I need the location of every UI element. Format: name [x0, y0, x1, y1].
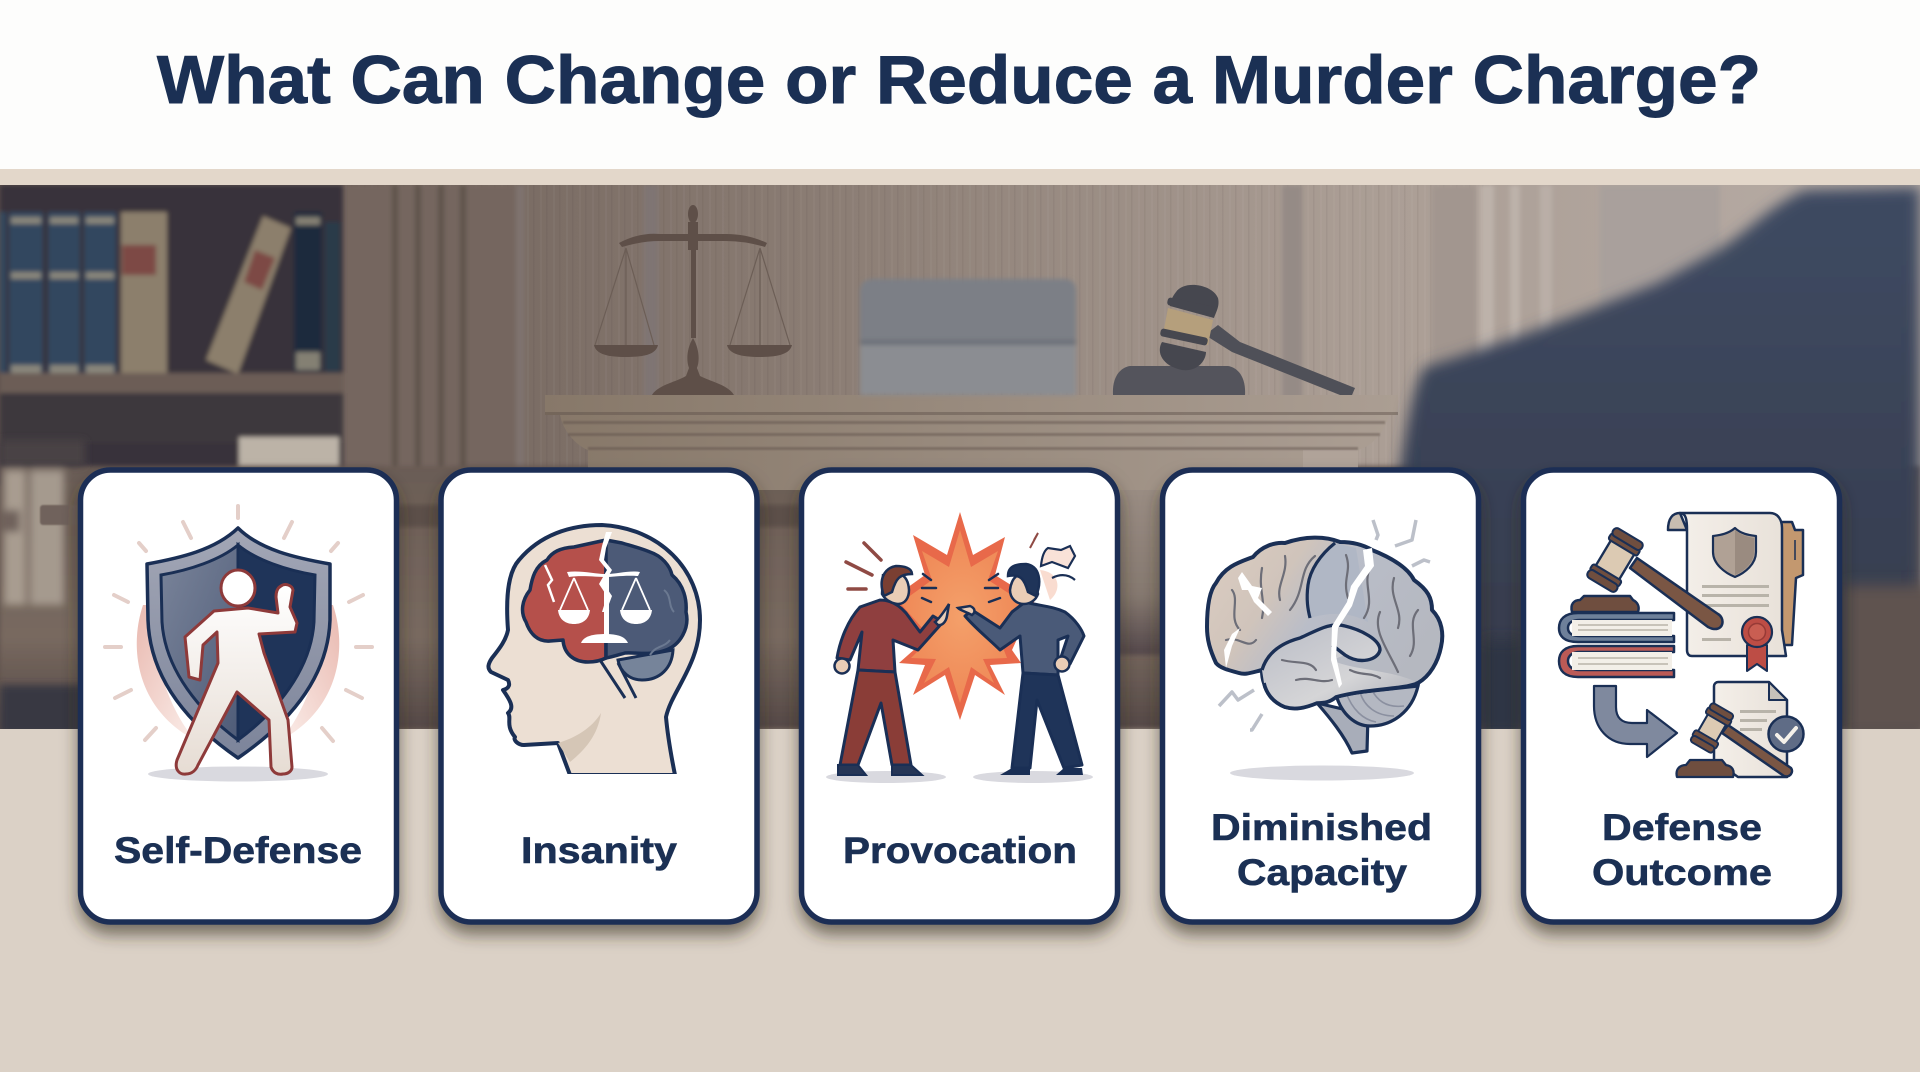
- blurred figure in foreground: [1398, 187, 1920, 729]
- label: Outcome: [1592, 852, 1772, 893]
- lower wall and left books: [0, 466, 1920, 729]
- card: Provocation: [802, 470, 1118, 922]
- label: Provocation: [843, 830, 1077, 871]
- label: Self-Defense: [114, 830, 362, 871]
- icon: legal documents, gavels, books and arrow: [1559, 513, 1804, 777]
- label: [1592, 807, 1772, 893]
- background photo: courtroom: [0, 185, 1920, 735]
- small document: [1714, 682, 1787, 777]
- ledge and lighter pillar seen between cards: [395, 505, 805, 527]
- accent strip: [0, 169, 1920, 185]
- books: [1559, 613, 1674, 642]
- label: Insanity: [521, 830, 677, 871]
- icon: head with split brain and scales: [488, 525, 700, 778]
- bookcase: [0, 185, 343, 485]
- judge chair: [860, 279, 1076, 395]
- card frame: [1162, 470, 1478, 922]
- arrow: [1594, 686, 1677, 757]
- card: Insanity: [441, 470, 757, 922]
- scales of justice: [594, 205, 792, 395]
- check badge: [1768, 716, 1804, 752]
- card frame: [802, 470, 1118, 922]
- card: Self-Defense: [80, 470, 396, 922]
- wood wall: [0, 185, 1920, 729]
- card: Diminished Capacity: [1162, 470, 1478, 922]
- icon: cracked brain: [1207, 520, 1442, 780]
- gavel 1: [1630, 558, 1723, 629]
- card frame: [441, 470, 757, 922]
- icon: shield with defending figure: [105, 506, 372, 782]
- sound block: [1571, 596, 1639, 612]
- gavel 2: [1722, 725, 1792, 776]
- right man: [965, 602, 1084, 675]
- icon: two men arguing with burst: [826, 512, 1093, 783]
- floor wall beyond figure: [1482, 585, 1920, 735]
- title: What Can Change or Reduce a Murder Charge?: [157, 42, 1761, 118]
- label: Diminished: [1211, 807, 1432, 848]
- label: Defense: [1602, 807, 1762, 848]
- label: [1211, 807, 1432, 893]
- scroll: [1668, 513, 1687, 530]
- label: Capacity: [1237, 852, 1407, 893]
- beige lower panel: [0, 729, 1920, 1072]
- card: Defense Outcome: [1524, 470, 1840, 922]
- left man: [837, 600, 943, 672]
- card frame: [1524, 470, 1840, 922]
- header band: [0, 0, 1920, 169]
- desk: [545, 395, 1398, 490]
- card frame: [80, 470, 396, 922]
- gavel on sound block: [1113, 285, 1355, 395]
- wall panelling: [392, 185, 1718, 467]
- folder: [1780, 522, 1803, 645]
